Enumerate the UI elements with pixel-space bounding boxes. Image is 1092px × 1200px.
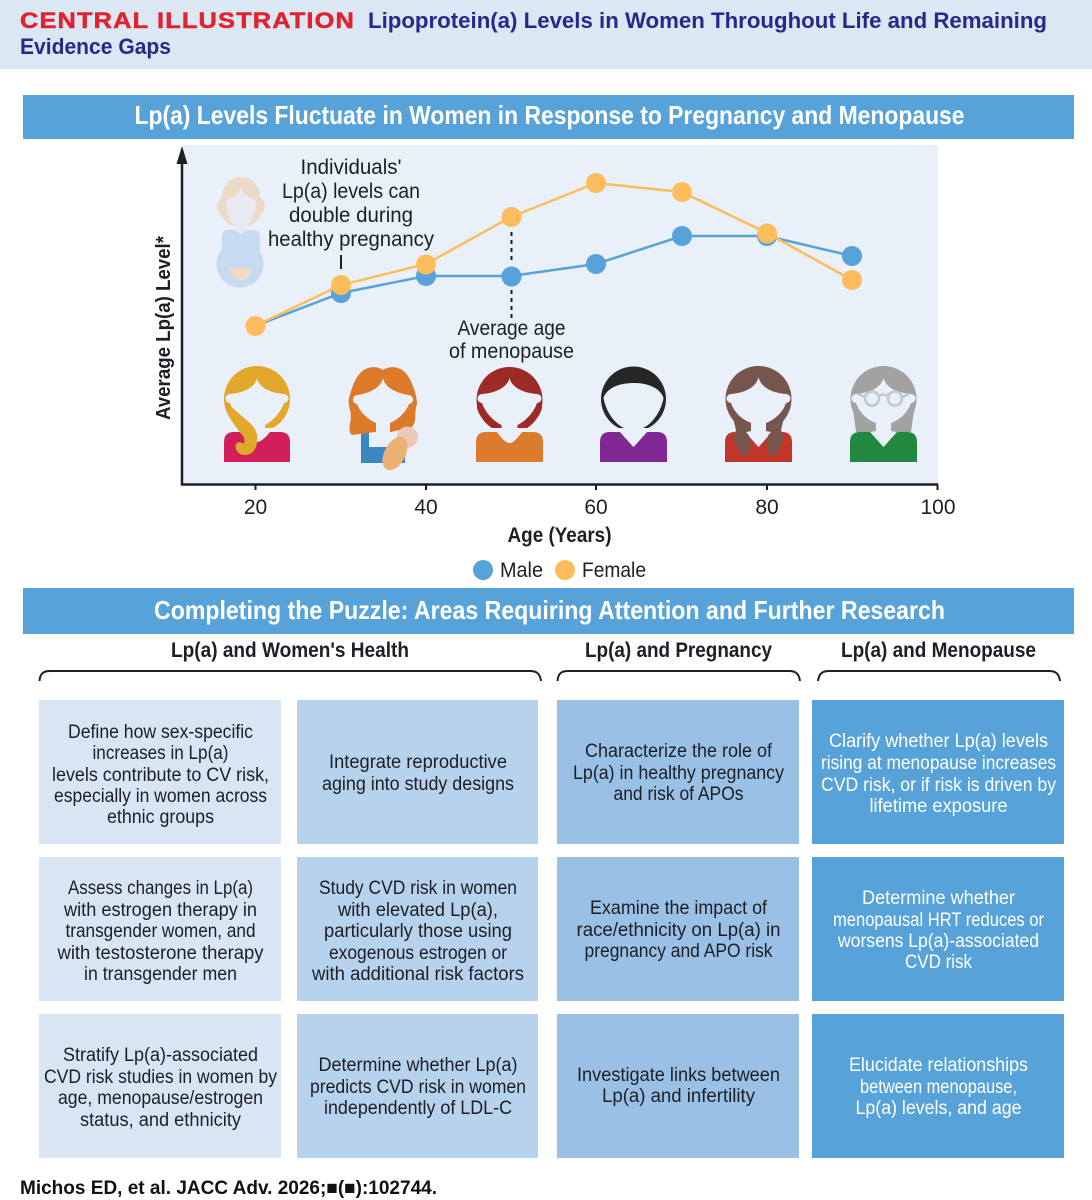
header banner	[0, 0, 1092, 69]
card: stratify studies: age, menopause/estrogen	[58, 1088, 263, 1109]
line series: female	[246, 173, 862, 336]
card: clarify menopause risk: Clarify whether Lp(a) levels	[829, 731, 1048, 752]
card: race and ethnicity in pregnancy: pregnancy and APO risk	[584, 941, 773, 962]
card: menopausal HRT: CVD risk	[905, 952, 972, 973]
icon: pregnant woman	[216, 177, 265, 288]
annotation: pregnancy: Individuals'	[300, 156, 402, 179]
card: stratify studies: status, and ethnicity	[80, 1110, 241, 1131]
card: independent of LDL-C: Determine whether Lp(a)	[318, 1055, 518, 1076]
column heading: pregnancy	[558, 639, 800, 681]
card: menopause, Lp(a), age: Elucidate relationships	[849, 1055, 1028, 1076]
card: menopause, Lp(a), age: Lp(a) levels, and age	[856, 1098, 1022, 1119]
card: race and ethnicity in pregnancy	[557, 857, 799, 1001]
icon: woman with red hair holding baby	[349, 367, 418, 474]
card: define sex-specific increases: especially in women across	[54, 786, 267, 807]
chart axes	[176, 146, 938, 490]
card: assess hormone therapy: in transgender men	[84, 964, 237, 985]
section heading: completing the puzzle: Completing the Puzzle: Areas Requiring Attention and Further Research	[154, 595, 945, 625]
card: define sex-specific increases: ethnic groups	[107, 807, 214, 828]
x axis tick labels	[244, 496, 956, 519]
x axis tick labels: 60	[584, 496, 608, 519]
card: integrate reproductive aging: Integrate reproductive	[329, 752, 507, 773]
card: clarify menopause risk: rising at menopause increases	[821, 753, 1056, 774]
title	[20, 8, 1047, 59]
card: menopausal HRT: Determine whether	[862, 888, 1016, 909]
x axis tick labels: 20	[244, 496, 267, 519]
legend: Female	[582, 559, 646, 582]
card: define sex-specific increases	[39, 700, 281, 844]
legend: Male	[500, 559, 543, 582]
x axis tick labels: 80	[755, 496, 779, 519]
card: menopausal HRT	[812, 857, 1064, 1001]
card: define sex-specific increases: levels contribute to CV risk,	[52, 765, 269, 786]
annotation: average age of menopause: Average age	[458, 317, 566, 340]
card: assess hormone therapy: transgender women, and	[66, 921, 256, 942]
card: clarify menopause risk: CVD risk, or if risk is driven by	[821, 775, 1056, 796]
card: menopause, Lp(a), age	[812, 1014, 1064, 1158]
annotation: average age of menopause	[449, 317, 574, 363]
card: study CVD risk: exogenous estrogen or	[329, 943, 508, 964]
card: study CVD risk: with additional risk factors	[311, 964, 524, 985]
card: stratify studies: CVD risk studies in women by	[44, 1067, 277, 1088]
card: infertility: Lp(a) and infertility	[602, 1086, 755, 1107]
icon: woman with dark red hair	[476, 367, 544, 462]
title: Lipoprotein(a) Levels in Women Throughout Life and Remaining	[368, 8, 1047, 33]
annotation: pregnancy: Lp(a) levels can	[282, 180, 420, 203]
chart panel background	[183, 145, 938, 484]
central illustration label: CENTRAL ILLUSTRATION	[20, 8, 355, 33]
card: independent of LDL-C: predicts CVD risk in women	[310, 1077, 526, 1098]
annotation: pregnancy	[268, 156, 434, 269]
annotation: pregnancy: healthy pregnancy	[268, 228, 434, 251]
icon: woman with brown braids	[725, 366, 792, 462]
x axis label: Age (Years)	[508, 524, 612, 547]
card: infertility	[557, 1014, 799, 1158]
card: stratify studies: Stratify Lp(a)-associated	[63, 1045, 258, 1066]
card: assess hormone therapy: with estrogen therapy in	[63, 900, 257, 921]
icon: young woman with blonde hair	[223, 366, 291, 462]
card: assess hormone therapy	[39, 857, 281, 1001]
card: study CVD risk: with elevated Lp(a),	[337, 900, 498, 921]
column heading: women's health: Lp(a) and Women's Health	[171, 639, 409, 662]
card: study CVD risk	[297, 857, 538, 1001]
card: menopausal HRT: menopausal HRT reduces or	[833, 910, 1045, 931]
x axis tick labels: 40	[414, 496, 438, 519]
card: study CVD risk: particularly those using	[324, 921, 512, 942]
card: race and ethnicity in pregnancy: Examine the impact of	[590, 898, 768, 919]
line series: male	[255, 226, 862, 326]
card: independent of LDL-C: independently of LDL-C	[324, 1098, 512, 1119]
y axis label: Average Lp(a) Level*	[153, 236, 175, 420]
icon: older woman with grey hair and glasses	[850, 366, 917, 462]
annotation: pregnancy: double during	[289, 204, 413, 227]
card: role of Lp(a) in healthy pregnancy	[557, 700, 799, 844]
card: integrate reproductive aging	[297, 700, 538, 844]
icon: woman with curly black hair	[599, 366, 668, 462]
annotation: menopause dotted line	[510, 232, 512, 318]
card: role of Lp(a) in healthy pregnancy: Lp(a) in healthy pregnancy	[573, 763, 784, 784]
column heading: menopause	[818, 639, 1060, 681]
citation: Michos ED, et al. JACC Adv. 2026;■(■):102744.	[20, 1178, 437, 1199]
section heading: Lp(a) levels fluctuate: Lp(a) Levels Fluctuate in Women in Response to Pregnancy and Menopause	[134, 100, 964, 130]
card: define sex-specific increases: Define how sex-specific	[68, 722, 253, 743]
card: independent of LDL-C	[297, 1014, 538, 1158]
column heading: pregnancy: Lp(a) and Pregnancy	[585, 639, 772, 662]
section heading: completing the puzzle	[23, 588, 1074, 634]
annotation: average age of menopause: of menopause	[449, 340, 574, 363]
card: infertility: Investigate links between	[577, 1065, 780, 1086]
card: stratify studies	[39, 1014, 281, 1158]
card: role of Lp(a) in healthy pregnancy: Characterize the role of	[585, 741, 773, 762]
section heading: Lp(a) levels fluctuate	[23, 95, 1074, 139]
card: define sex-specific increases: increases in Lp(a)	[92, 743, 228, 764]
card: assess hormone therapy: with testosterone therapy	[57, 943, 264, 964]
card: clarify menopause risk: lifetime exposure	[870, 796, 1008, 817]
card: integrate reproductive aging: aging into study designs	[322, 774, 514, 795]
title: Evidence Gaps	[20, 34, 171, 59]
card: assess hormone therapy: Assess changes in Lp(a)	[68, 878, 253, 899]
card: menopausal HRT: worsens Lp(a)-associated	[837, 931, 1039, 952]
column heading: women's health	[40, 639, 541, 681]
card: clarify menopause risk	[812, 700, 1064, 844]
column heading: menopause: Lp(a) and Menopause	[841, 639, 1036, 662]
card: role of Lp(a) in healthy pregnancy: and risk of APOs	[614, 784, 744, 805]
legend	[473, 559, 646, 582]
x axis tick labels: 100	[920, 496, 956, 519]
card: race and ethnicity in pregnancy: race/ethnicity on Lp(a) in	[576, 920, 780, 941]
card: menopause, Lp(a), age: between menopause,	[860, 1077, 1017, 1098]
card: study CVD risk: Study CVD risk in women	[319, 878, 517, 899]
